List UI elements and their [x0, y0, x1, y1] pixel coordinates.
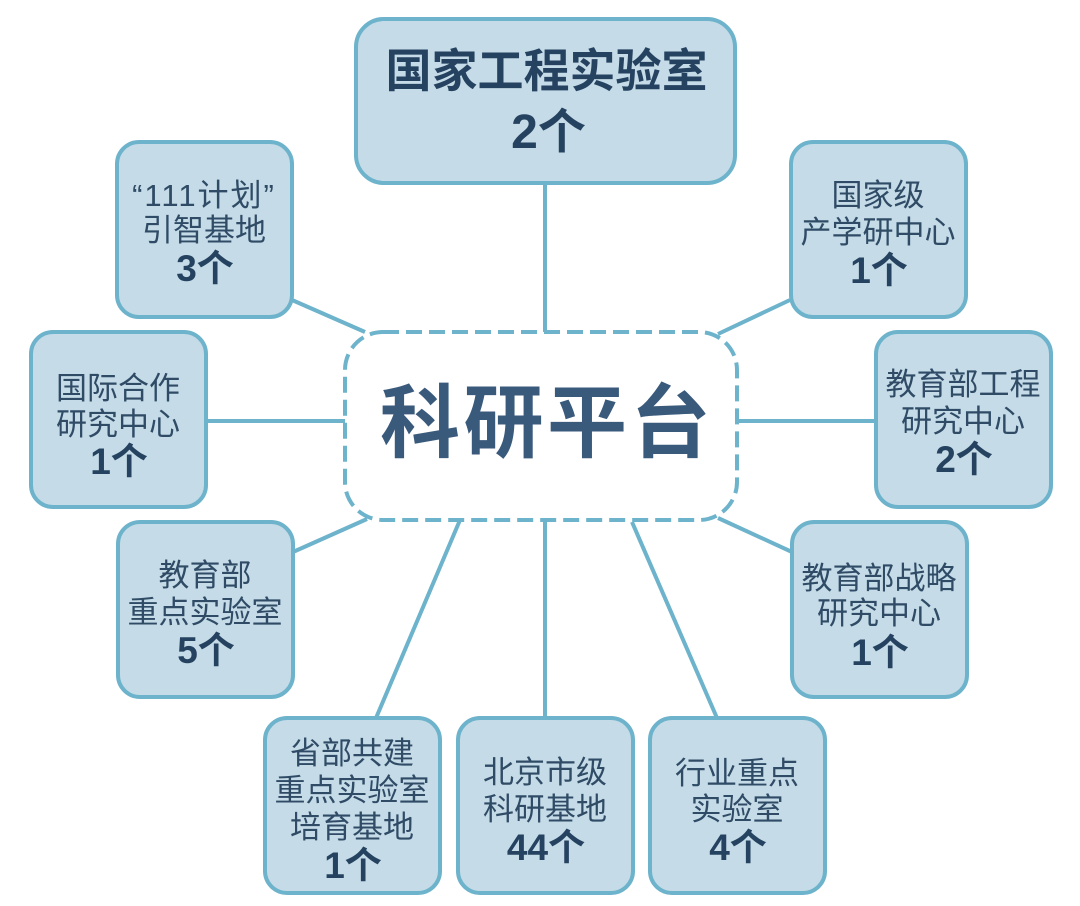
top panel: 国家工程实验室 — [354, 17, 737, 185]
top panel: 国家工程实验室: 2个 — [511, 106, 586, 159]
panel: 教育部工程研究中心 — [874, 330, 1053, 509]
panel: 国家级产学研中心: 1个 — [850, 250, 908, 291]
panel: 行业重点实验室 — [648, 716, 827, 895]
center panel: 科研平台 — [343, 330, 739, 522]
panel: 行业重点实验室: 4个 — [709, 827, 767, 868]
panel: 北京市级科研基地: 44个 — [507, 827, 585, 868]
panel: 111计划: 3个 — [176, 248, 234, 289]
panel: 国家级产学研中心 — [789, 140, 968, 319]
panel: 省部共建重点实验室培育基地 — [263, 716, 442, 895]
panel: 教育部战略研究中心: 研究中心 — [817, 596, 941, 631]
panel: 行业重点实验室: 实验室 — [690, 792, 784, 827]
panel: 国际合作研究中心 — [29, 330, 208, 509]
panel: 111计划 — [115, 140, 294, 319]
panel: 教育部战略研究中心: 教育部战略 — [802, 561, 956, 596]
panel: 教育部工程研究中心: 研究中心 — [901, 404, 1025, 439]
panel: 111计划: 引智基地 — [142, 213, 266, 248]
top panel: 国家工程实验室: 国家工程实验室 — [386, 45, 708, 97]
panel: 北京市级科研基地 — [456, 716, 635, 895]
panel: 国际合作研究中心: 研究中心 — [56, 407, 180, 442]
panel: 教育部重点实验室: 重点实验室 — [128, 595, 282, 630]
panel: 省部共建重点实验室培育基地: 省部共建 — [290, 736, 414, 771]
panel: 教育部工程研究中心: 教育部工程 — [886, 367, 1040, 402]
panel: 省部共建重点实验室培育基地: 培育基地 — [290, 810, 414, 845]
panel: 省部共建重点实验室培育基地: 重点实验室 — [274, 773, 430, 808]
panel: 教育部重点实验室: 5个 — [177, 630, 235, 671]
panel: 国家级产学研中心: 产学研中心 — [800, 215, 956, 250]
panel: 省部共建重点实验室培育基地: 1个 — [324, 845, 382, 886]
panel: 行业重点实验室: 行业重点 — [675, 756, 799, 791]
panel: 教育部重点实验室 — [116, 520, 295, 699]
panel: 教育部战略研究中心: 1个 — [851, 632, 909, 673]
panel: 111计划: “111计划” — [132, 178, 276, 213]
panel: 国际合作研究中心: 国际合作 — [56, 371, 180, 406]
center panel: 科研平台: 科研平台 — [380, 379, 714, 468]
panel: 北京市级科研基地: 北京市级 — [483, 755, 607, 790]
panel: 国家级产学研中心: 国家级 — [832, 178, 924, 213]
panel: 教育部战略研究中心 — [790, 520, 969, 699]
panel: 教育部重点实验室: 教育部 — [158, 558, 252, 593]
panel: 北京市级科研基地: 科研基地 — [483, 792, 607, 827]
panel: 国际合作研究中心: 1个 — [90, 441, 148, 482]
panel: 教育部工程研究中心: 2个 — [935, 439, 993, 480]
